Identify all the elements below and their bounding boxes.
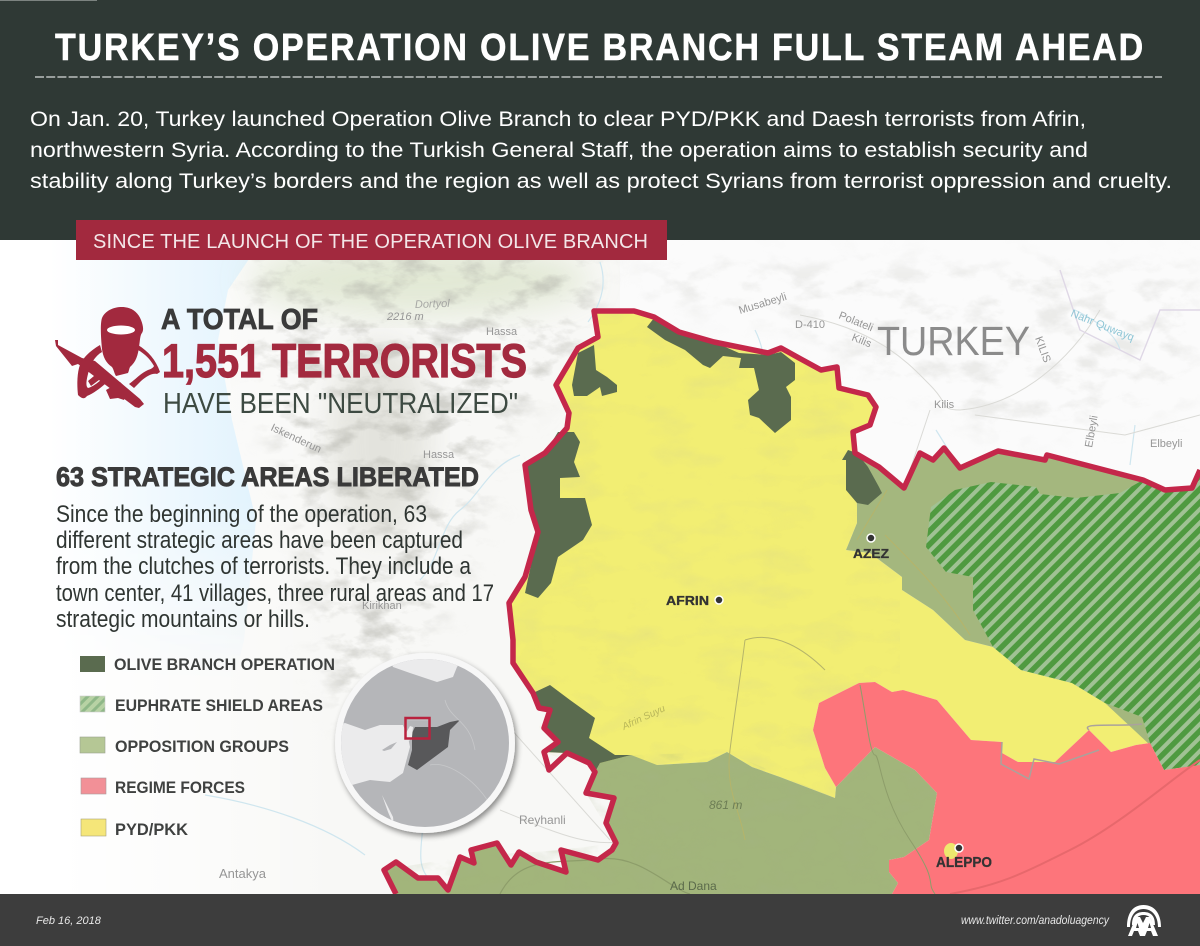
map place labels: Elbeyli xyxy=(1083,415,1101,449)
city: Aleppo xyxy=(936,843,992,868)
legend: pyd/pkk: PYD/PKK xyxy=(115,820,189,839)
territory: opposition groups north-east xyxy=(846,448,1200,780)
strategic areas text: from the clutches of terrorists. They include a xyxy=(56,553,472,580)
map place labels: Iskenderun xyxy=(269,422,323,456)
legend: euphrate shield: EUPHRATE SHIELD AREAS xyxy=(115,696,323,715)
map place labels: 2216 m xyxy=(386,311,424,323)
map place labels: D-410 xyxy=(795,319,825,331)
map place labels: Nahr Quwayq xyxy=(1069,308,1136,344)
legend: opposition: OPPOSITION GROUPS xyxy=(115,737,289,756)
map place labels: KILIS xyxy=(1032,335,1053,364)
section banner xyxy=(76,220,667,260)
south labels: 861 m xyxy=(709,798,742,812)
territory: PYD/PKK yellow xyxy=(509,311,1150,798)
city: Afrin: AFRIN xyxy=(666,593,709,608)
legend: regime: REGIME FORCES xyxy=(115,778,245,797)
map place labels: Hassa xyxy=(486,326,518,338)
city: Afrin xyxy=(666,595,724,606)
territory: olive branch operation patches xyxy=(525,318,882,772)
map place labels: Kilis xyxy=(850,332,874,351)
territory: opposition groups south xyxy=(384,747,937,894)
south green relief xyxy=(407,754,826,876)
map background xyxy=(107,251,1200,894)
map place labels: Kirikhan xyxy=(362,600,402,612)
map place labels xyxy=(219,291,1182,881)
territory: regime forces xyxy=(813,682,1200,894)
map place labels: Polateli xyxy=(837,310,875,334)
strategic areas text: town center, 41 villages, three rural areas and 17 xyxy=(56,580,494,607)
south labels: Afrin Suyu xyxy=(620,703,667,733)
map place labels: Elbeyli xyxy=(1150,438,1182,450)
sea gradient xyxy=(118,260,256,617)
map place labels: Musabeyli xyxy=(737,291,788,317)
strategic areas text: different strategic areas have been captured xyxy=(56,527,463,554)
strategic areas heading: 63 STRATEGIC AREAS LIBERATED xyxy=(56,462,479,492)
inset locator map xyxy=(335,650,515,835)
map place labels: Dortyol xyxy=(415,298,450,311)
stat: terrorists neutralized: HAVE BEEN "NEUTRALIZED" xyxy=(163,388,518,420)
section banner: SINCE THE LAUNCH OF THE OPERATION OLIVE BRANCH xyxy=(93,231,648,253)
intro paragraph xyxy=(30,107,1172,193)
map place labels: Antakya xyxy=(219,866,267,881)
legend: pyd/pkk xyxy=(81,819,189,839)
east white wash xyxy=(620,240,1200,500)
left white fade xyxy=(0,662,76,894)
south labels: Ad Dana xyxy=(670,879,717,893)
footer bar xyxy=(0,894,1200,946)
strategic areas text: strategic mountains or hills. xyxy=(56,606,310,633)
header panel xyxy=(0,0,1200,240)
territory: euphrates shield hatch xyxy=(926,470,1200,770)
south labels xyxy=(620,703,742,893)
rivers and roads xyxy=(205,262,1200,880)
map place labels: Hassa xyxy=(423,449,455,461)
city: Aleppo: ALEPPO xyxy=(936,854,992,871)
legend xyxy=(80,655,335,839)
strategic areas text xyxy=(56,501,494,633)
city: Azez: AZEZ xyxy=(853,546,889,561)
strategic areas text: Since the beginning of the operation, 63 xyxy=(56,501,427,528)
intro paragraph: northwestern Syria. According to the Turkish General Staff, the operation aims to establish security and xyxy=(30,138,1088,162)
map place labels: Reyhanli xyxy=(519,813,566,827)
stat: terrorists neutralized: 1,551 TERRORISTS xyxy=(162,334,527,387)
TURKEY label: TURKEY xyxy=(877,318,1030,364)
intro paragraph: stability along Turkey’s borders and the region as well as protect Syrians from terrorist oppression and cruelty. xyxy=(30,169,1172,193)
yellow zone relief xyxy=(548,740,562,756)
stat: terrorists neutralized xyxy=(161,304,527,420)
legend: olive branch: OLIVE BRANCH OPERATION xyxy=(114,655,335,674)
icon: masked gunman xyxy=(55,307,160,408)
footer bar: www.twitter.com/anadoluagency xyxy=(961,915,1110,927)
border line xyxy=(384,311,1200,894)
icon: AA logo xyxy=(1127,905,1161,936)
terrain relief xyxy=(234,260,1195,694)
map place labels: Kilis xyxy=(934,399,955,411)
stat: terrorists neutralized: A TOTAL OF xyxy=(161,304,318,336)
roads over territories xyxy=(500,490,1200,894)
city: Azez xyxy=(853,534,889,561)
intro paragraph: On Jan. 20, Turkey launched Operation Olive Branch to clear PYD/PKK and Daesh terrorists from Afrin, xyxy=(30,107,1086,131)
footer bar: Feb 16, 2018 xyxy=(36,915,102,927)
